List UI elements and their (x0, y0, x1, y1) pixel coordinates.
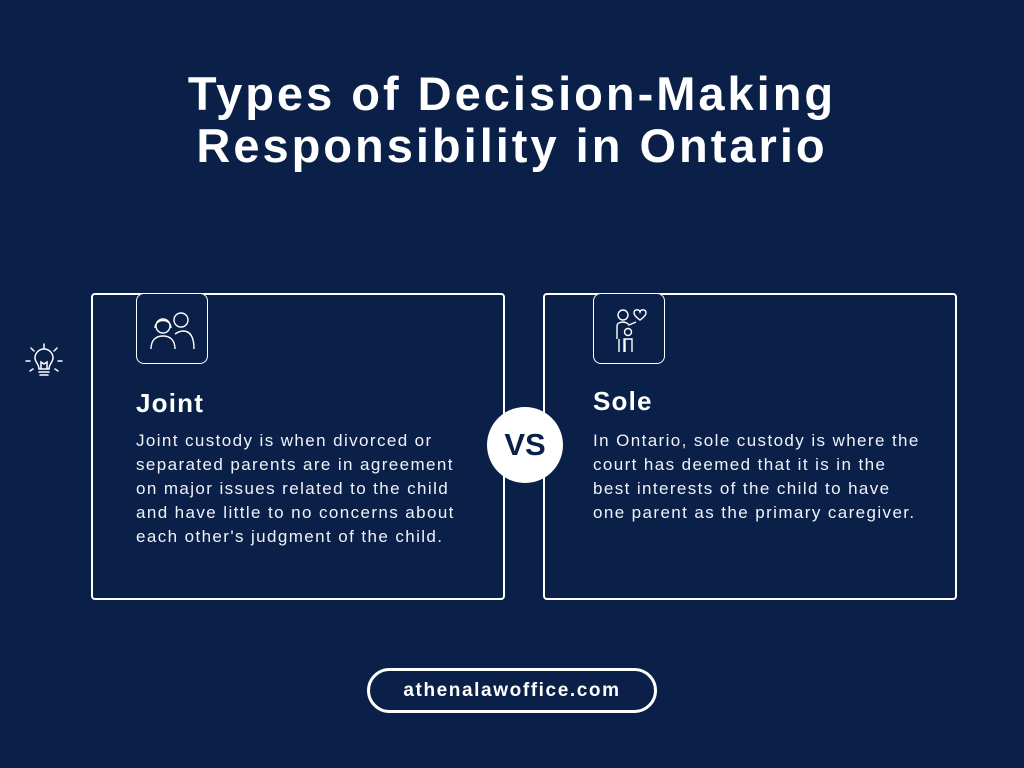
panel: joint (91, 293, 505, 600)
icon: lightbulb (25, 343, 63, 376)
text: sole description (593, 431, 920, 522)
url pill (367, 668, 657, 713)
heading: Sole: Sole (593, 386, 653, 416)
text: sole description: best interests of the child to have (593, 479, 891, 498)
icon: parent with child (593, 293, 665, 364)
url pill: athenalawoffice.com (403, 680, 621, 701)
text: joint description: Joint custody is when divorced or (136, 431, 433, 450)
vs badge: VS (504, 427, 546, 462)
text: joint description: each other's judgment of the child. (136, 527, 443, 546)
title: Responsibility in Ontario (196, 119, 828, 172)
text: sole description: one parent as the primary caregiver. (593, 503, 916, 522)
text: joint description: on major issues related to the child (136, 479, 449, 498)
icon: parents (136, 293, 208, 364)
text: joint description (136, 431, 455, 546)
title (188, 67, 836, 172)
text: sole description: court has deemed that it is in the (593, 455, 886, 474)
vs badge (487, 407, 563, 483)
text: joint description: and have little to no concerns about (136, 503, 455, 522)
panel: sole (543, 293, 957, 600)
text: sole description: In Ontario, sole custody is where the (593, 431, 920, 450)
heading: Joint: Joint (136, 388, 204, 418)
text: joint description: separated parents are in agreement (136, 455, 454, 474)
title: Types of Decision-Making (188, 67, 836, 120)
